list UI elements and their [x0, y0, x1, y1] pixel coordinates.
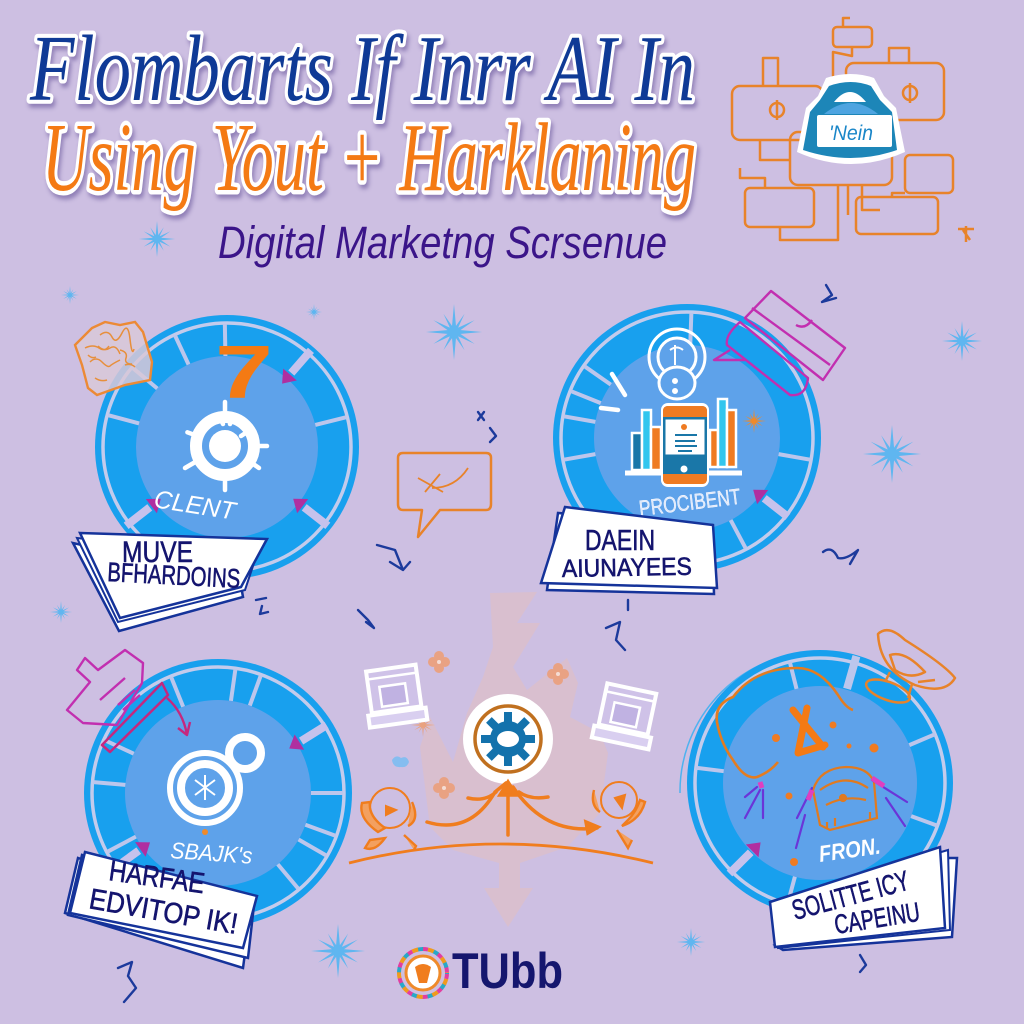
panel: client wheel [73, 315, 359, 631]
panel: procibent wheel [541, 291, 845, 594]
navy squiggles [118, 285, 866, 1002]
banner: solitte: SOLITTE ICY [789, 865, 913, 926]
wheel [84, 659, 352, 927]
icon: bag [797, 74, 905, 164]
wheel label: SBAJK's [170, 837, 254, 869]
title line 1: Flombarts If Inrr AI In [29, 17, 695, 121]
title [29, 17, 696, 212]
title line 2: Using Yout + Harklaning [42, 104, 696, 212]
icon: dashes [601, 374, 625, 410]
icon: laptop right [592, 683, 660, 749]
decorative stars [50, 221, 982, 978]
panel: fron wheel [680, 630, 957, 950]
ground line [349, 844, 653, 863]
icon: small orange mark [958, 226, 974, 242]
banner: harfae: EDVITOP IK! [87, 883, 240, 941]
icon: phone and bars [625, 399, 742, 487]
banner: solitte: CAPEINU [832, 897, 922, 940]
wheel label: FRON. [817, 833, 882, 867]
icon: lock badge [170, 737, 261, 823]
pale flame arrow [420, 592, 608, 927]
icon: chair sketch [813, 767, 877, 830]
banner: solitte [770, 847, 957, 950]
banner: move: BFHARDOINS [107, 557, 241, 594]
banner: move: MUVE [122, 536, 193, 569]
icon: person head [649, 329, 705, 399]
icon: orange sparkle [742, 409, 766, 433]
orange dots [772, 722, 878, 866]
logo [399, 943, 563, 999]
orange dot [202, 829, 208, 835]
icon: magenta speech card [714, 291, 845, 395]
wheel [553, 304, 821, 572]
banner: daein: AIUNAYEES [562, 553, 692, 583]
banner: harfae: HARFAE [107, 855, 207, 900]
banner: daein [541, 507, 717, 594]
icon: orange X [793, 708, 825, 753]
center illustration [349, 592, 660, 927]
icon: orange headset curve [717, 668, 853, 777]
wheel [680, 650, 953, 916]
icon: note scribble [75, 322, 152, 395]
subtitle: Digital Marketng Scrsenue [218, 217, 667, 268]
wheel label: PROCIBENT [638, 484, 742, 521]
banner: harfae [65, 852, 257, 968]
panel: sbajk wheel [65, 650, 352, 968]
banner: move [73, 533, 267, 631]
number 7: 7 [215, 330, 273, 414]
icon: orange lamp [863, 630, 955, 707]
icon: magenta card with arrow [67, 650, 190, 752]
icon: ship wheel [185, 402, 267, 490]
banner: daein: DAEIN [585, 525, 655, 557]
icon: right figure [593, 782, 645, 848]
logo icon [399, 949, 447, 997]
orange network diagram with bag icon [732, 18, 953, 240]
orange arrows [427, 782, 598, 835]
icon: left figure [361, 788, 416, 850]
speech bubble [398, 453, 491, 537]
pale flowers [392, 651, 569, 799]
wheel [95, 315, 359, 579]
logo wordmark: TUbb [452, 943, 563, 999]
wheel label: CLENT [152, 485, 239, 526]
icon: gear badge [463, 694, 553, 784]
bag label: 'Nein [829, 122, 873, 145]
magenta accents [760, 778, 884, 800]
purple strokes [745, 780, 907, 848]
icon: laptop left [362, 664, 427, 728]
